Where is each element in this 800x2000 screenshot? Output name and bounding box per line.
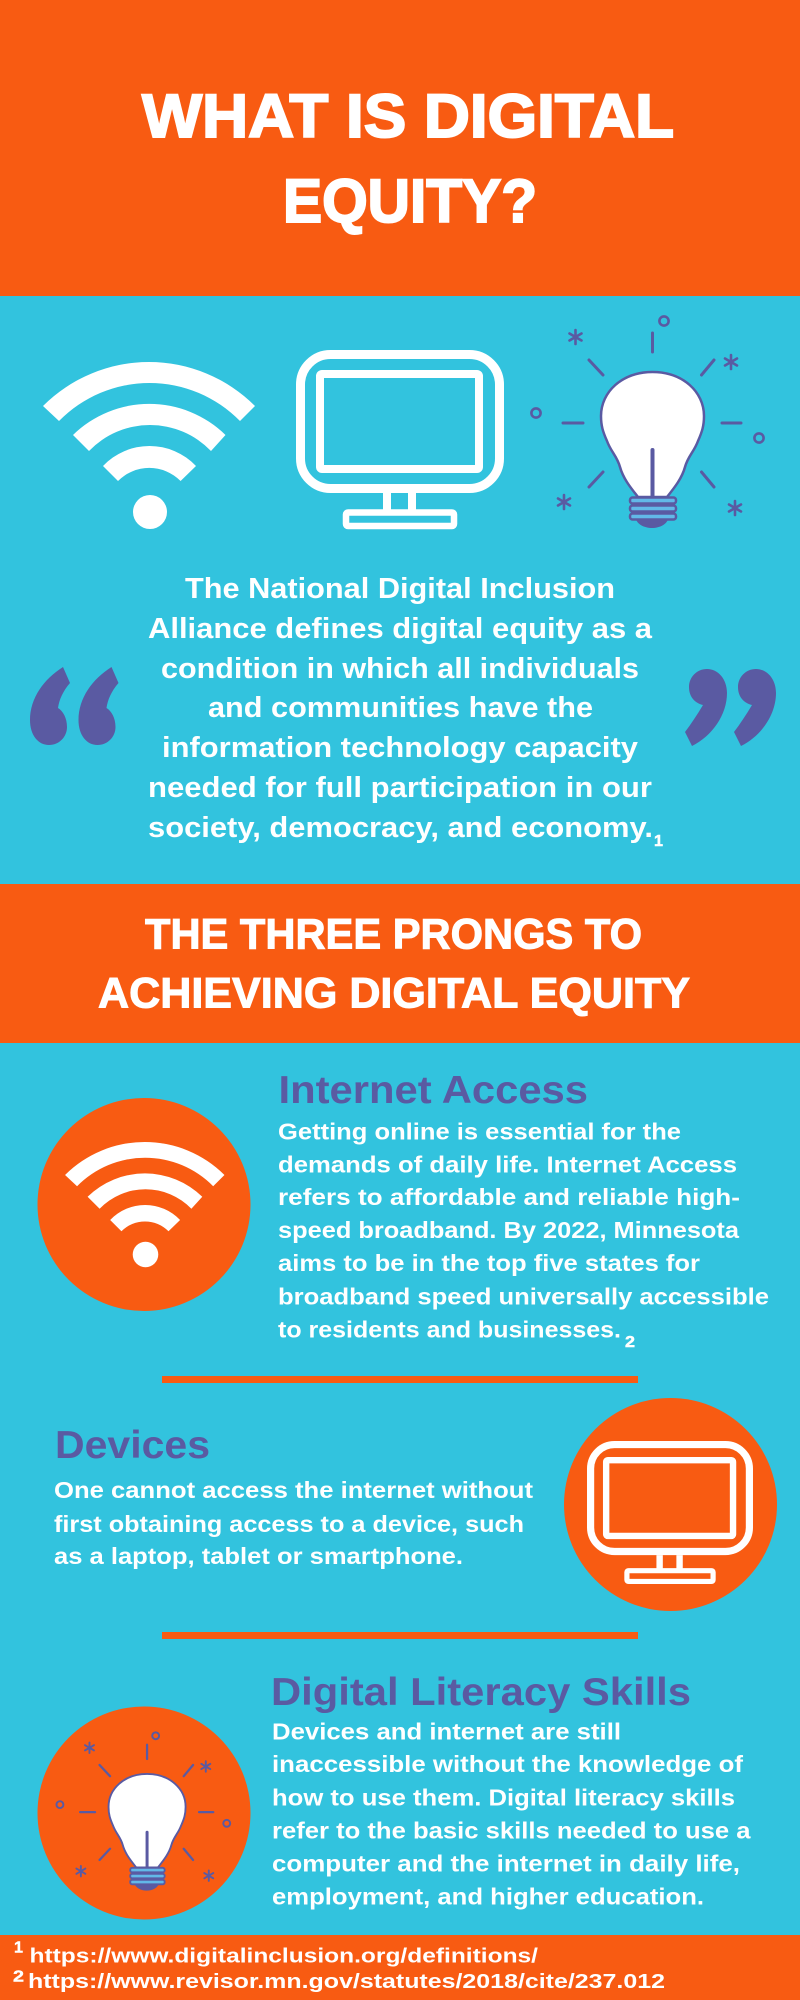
text: digital literacy skills: how to use them. Digital literacy skills	[272, 1785, 735, 1811]
title: WHAT IS DIGITAL	[142, 82, 674, 150]
text: digital literacy skills: Devices and internet are still	[272, 1718, 621, 1744]
source 1: https://www.digitalinclusion.org/definitions/	[30, 1946, 539, 1968]
definition text: and communities have the	[208, 692, 593, 724]
text: internet access	[278, 1118, 769, 1351]
panel: footer sources	[0, 1935, 800, 2000]
definition text: condition in which all individuals	[161, 653, 639, 685]
text: digital literacy skills: employment, and higher education.	[272, 1884, 704, 1910]
title	[142, 82, 674, 235]
definition text	[148, 573, 663, 850]
text: internet access: refers to affordable and reliable high-	[278, 1184, 740, 1210]
text: internet access: speed broadband. By 2022, Minnesota	[278, 1217, 739, 1243]
definition text: Alliance defines digital equity as a	[148, 613, 653, 645]
text: internet access: Getting online is essential for the	[278, 1118, 681, 1144]
definition text: The National Digital Inclusion	[185, 573, 615, 605]
source 1: 1	[14, 1940, 23, 1957]
definition text: society, democracy, and economy.	[148, 812, 653, 844]
text: internet access: broadband speed universally accessible	[278, 1284, 769, 1310]
icon: computer monitor	[300, 354, 500, 526]
panel: definition	[0, 296, 800, 884]
icon: monitor in orange circle	[564, 1398, 777, 1611]
definition text: needed for full participation in our	[148, 772, 652, 804]
source 1	[14, 1940, 539, 1968]
text: devices: One cannot access the internet without	[54, 1477, 533, 1503]
heading	[98, 910, 690, 1018]
section: internet access	[38, 1069, 769, 1351]
text: digital literacy skills: computer and the internet in daily life,	[272, 1851, 740, 1877]
text: internet access: aims to be in the top five states for	[278, 1250, 700, 1276]
text: internet access: demands of daily life. Internet Access	[278, 1151, 737, 1177]
heading: internet access: Internet Access	[278, 1069, 588, 1112]
text: digital literacy skills: inaccessible without the knowledge of	[272, 1751, 743, 1777]
text: devices	[54, 1477, 533, 1569]
heading: devices: Devices	[55, 1424, 210, 1467]
definition text: 1	[654, 833, 663, 850]
icon: closing quote mark	[685, 669, 776, 746]
text: digital literacy skills	[272, 1718, 751, 1910]
text: digital literacy skills: refer to the basic skills needed to use a	[272, 1818, 751, 1844]
icon: light bulb	[531, 316, 764, 528]
source 2: 2	[13, 1969, 24, 1986]
panel: header	[0, 0, 800, 296]
source 2: https://www.revisor.mn.gov/statutes/2018/cite/237.012	[28, 1971, 665, 1993]
icon: wifi in orange circle	[38, 1098, 250, 1311]
heading: THE THREE PRONGS TO	[145, 910, 642, 958]
text: internet access: 2	[625, 1334, 635, 1351]
definition text: information technology capacity	[162, 732, 638, 764]
icon: light bulb in orange circle	[38, 1706, 250, 1920]
section: devices	[54, 1398, 777, 1611]
text: internet access: to residents and businesses.	[278, 1317, 621, 1343]
icon: opening quote mark	[30, 667, 118, 745]
heading: ACHIEVING DIGITAL EQUITY	[98, 970, 690, 1018]
heading: digital literacy skills: Digital Literacy Skills	[271, 1671, 691, 1714]
icon: wifi	[43, 362, 255, 529]
panel: prongs heading band	[0, 884, 800, 1043]
text: devices: as a laptop, tablet or smartphone.	[54, 1543, 463, 1569]
title: EQUITY?	[283, 167, 537, 235]
section: digital literacy skills	[38, 1671, 751, 1920]
panel: three prongs	[0, 1043, 800, 1935]
text: devices: first obtaining access to a device, such	[54, 1511, 524, 1537]
